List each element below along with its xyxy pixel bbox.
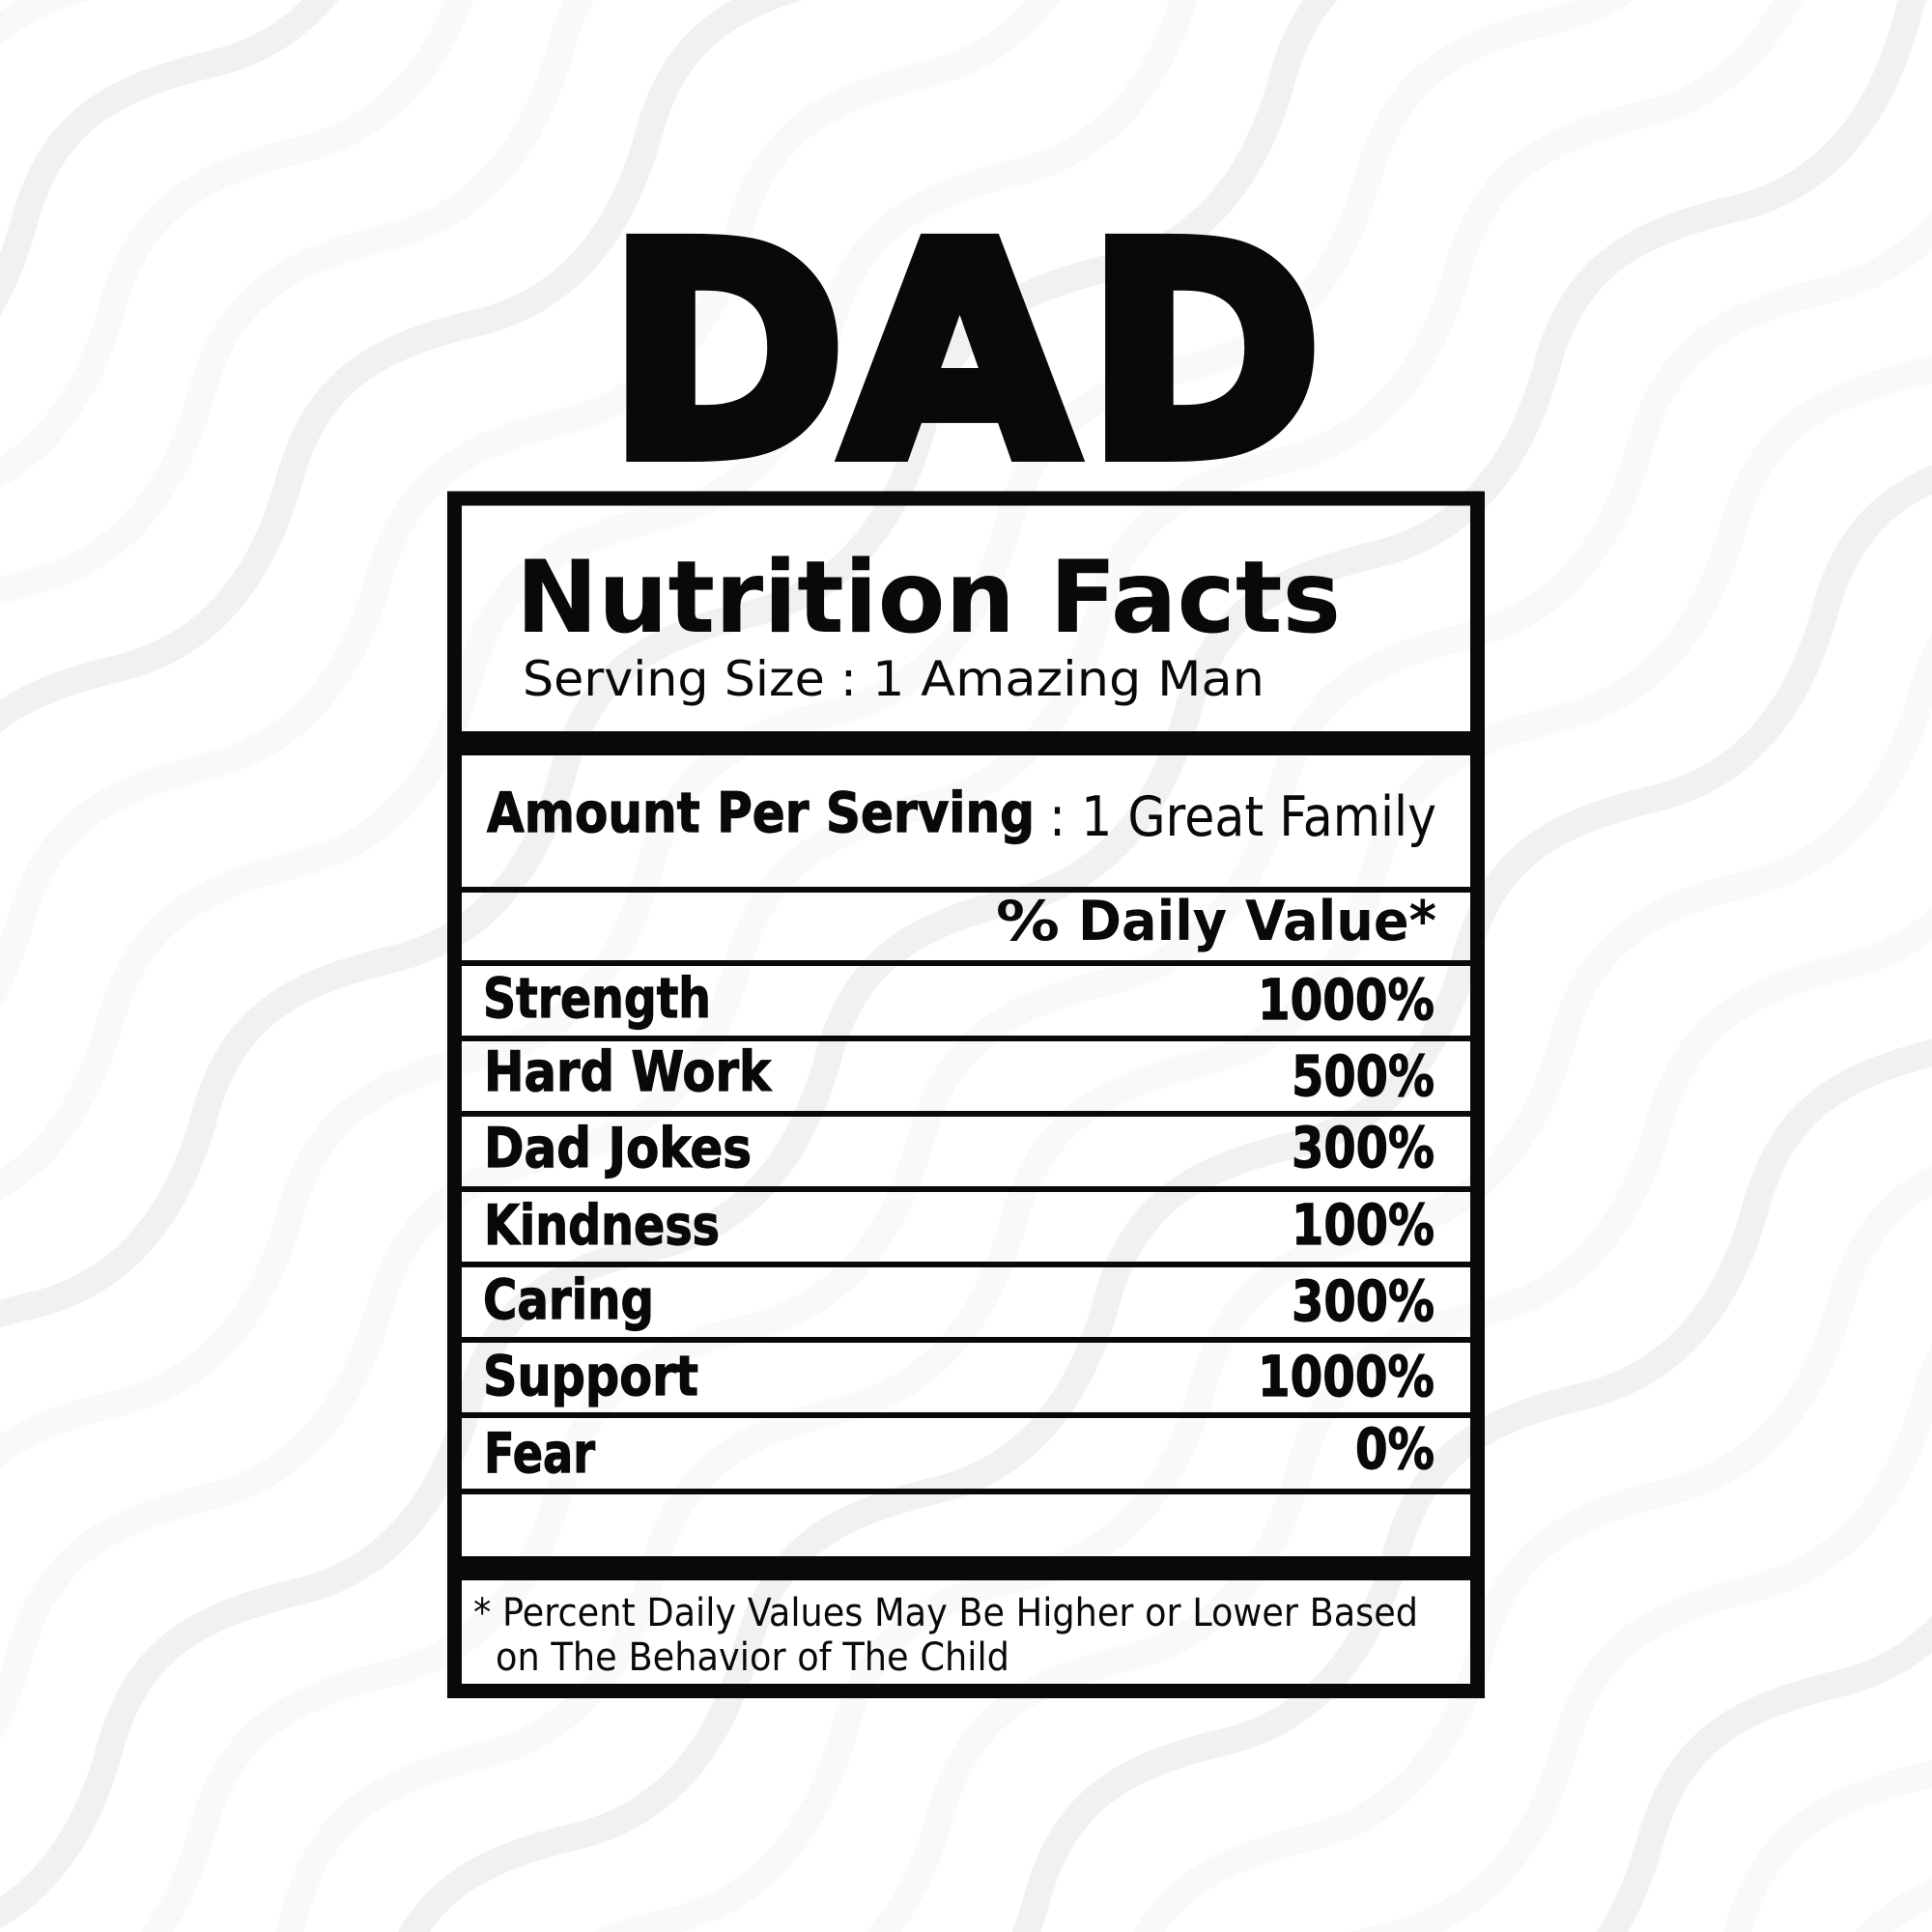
row: Fear	[484, 1416, 1435, 1486]
thick divider	[462, 731, 1470, 755]
text: serving size: Serving Size :	[523, 651, 857, 707]
text: serving size: 1 Amazing Man	[872, 651, 1264, 707]
text: amount per serving	[487, 781, 1436, 849]
text: serving size	[523, 651, 1264, 707]
row: Hard Work: 500%	[1292, 1043, 1435, 1109]
row: Caring	[483, 1268, 1435, 1334]
row: Hard Work: Hard Work	[484, 1040, 772, 1104]
panel: nutrition facts label	[454, 498, 1478, 1690]
heading: % Daily Value: Daily Value*	[1078, 890, 1436, 953]
footnote: * Percent Daily Values May Be Higher or Lower Based	[473, 1591, 1418, 1635]
row: Dad Jokes: 300%	[1292, 1115, 1435, 1180]
row: Support: Support	[483, 1345, 698, 1408]
row: Strength: Strength	[483, 967, 711, 1031]
panel frame	[454, 498, 1478, 1690]
text: amount per serving: : 1 Great Family	[1049, 785, 1436, 849]
thick divider	[462, 1556, 1470, 1580]
row: Strength	[483, 967, 1435, 1033]
title: DAD: D	[608, 185, 845, 524]
row: Kindness	[484, 1192, 1435, 1258]
row: Support	[483, 1344, 1435, 1409]
title: DAD	[608, 185, 1321, 524]
title: DAD: A	[844, 185, 1077, 524]
row: Support: 1000%	[1258, 1344, 1435, 1409]
footnote: on The Behavior of The Child	[496, 1635, 1009, 1680]
row: Hard Work	[484, 1040, 1435, 1109]
row: Strength: 1000%	[1258, 967, 1435, 1033]
heading: Nutrition Facts: Nutrition Facts	[516, 540, 1341, 656]
text: amount per serving: Amount Per Serving	[487, 781, 1035, 845]
row: Dad Jokes	[484, 1115, 1435, 1180]
row: Dad Jokes: Dad Jokes	[484, 1117, 752, 1180]
row: Fear: Fear	[484, 1422, 595, 1486]
footnote	[473, 1591, 1418, 1680]
row: Caring: 300%	[1292, 1268, 1435, 1334]
row: Fear: 0%	[1355, 1416, 1435, 1482]
row: Kindness: 100%	[1292, 1192, 1435, 1258]
row: Caring: Caring	[483, 1268, 654, 1332]
heading: % Daily Value: %	[996, 890, 1060, 953]
row lines	[462, 887, 1470, 1494]
row: Kindness: Kindness	[484, 1194, 720, 1258]
title: DAD: D	[1087, 185, 1321, 524]
